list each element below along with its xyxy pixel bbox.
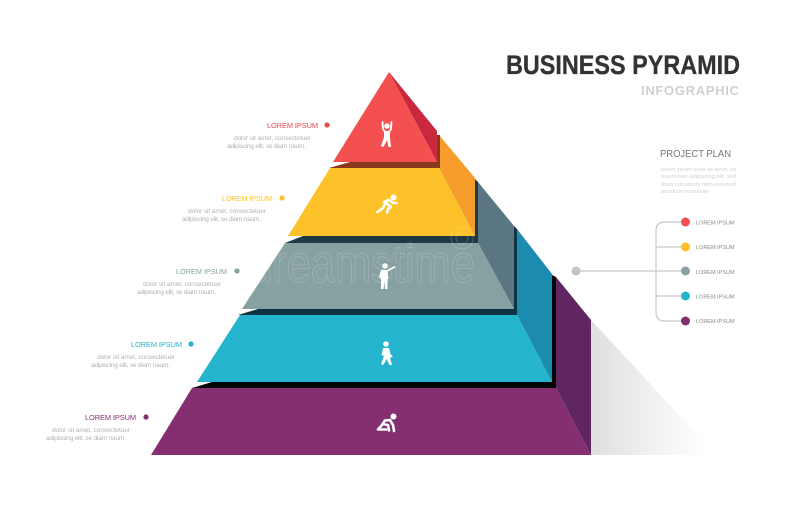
icon: person pointing [379, 263, 394, 289]
tier 4: blue [197, 229, 552, 382]
label 4: blue: dolor sit amet, consectetuer [97, 354, 176, 361]
tier 1 shadow [329, 135, 440, 168]
tier 3 shadow [238, 226, 517, 315]
project plan text: lorem ipsum dolor sit amet, co [661, 167, 736, 173]
label 4: blue: adipiscing elit, se diam naum. [91, 362, 170, 369]
project plan text: diam nonummy nibh euismod [661, 182, 736, 188]
label 3: grey: LOREM IPSUM [176, 267, 227, 276]
title: BUSINESS PYRAMID [506, 50, 740, 80]
connector start dot [572, 266, 580, 276]
tier 4 shadow [192, 275, 556, 388]
pyramid [151, 72, 591, 455]
tier 3: grey [242, 182, 514, 309]
label 5: purple: dolor sit amet, consectetuer [52, 427, 131, 434]
project plan heading: PROJECT PLAN [660, 148, 731, 160]
legend item 4 [681, 292, 735, 300]
tier 2: yellow [288, 135, 475, 236]
icon: walking person [381, 341, 393, 365]
subtitle: INFOGRAPHIC [641, 83, 740, 98]
legend item 1: LOREM IPSUM [696, 220, 735, 226]
project plan text: nsectetuer adipiscing elit, sed [661, 174, 736, 180]
label 5: purple: LOREM IPSUM [85, 413, 136, 422]
label 4: blue [91, 340, 194, 369]
legend item 3: LOREM IPSUM [696, 270, 735, 276]
legend item 1 [681, 218, 735, 226]
icon: running person [378, 194, 396, 212]
tier 2 shadow [285, 179, 478, 243]
cast shadow [591, 320, 705, 455]
tier 1: red [333, 72, 437, 162]
label 3: grey: dolor sit amet, consectetuer [143, 281, 222, 288]
legend item 2: LOREM IPSUM [696, 245, 735, 251]
legend item 5 [681, 316, 735, 326]
legend item 4: LOREM IPSUM [696, 294, 735, 300]
project plan text: tincidunt reconsuer [661, 189, 709, 195]
tier 5: purple [151, 277, 591, 455]
label 1: red: adipiscing elit, se diam naum. [227, 143, 306, 150]
legend item 5: LOREM IPSUM [696, 319, 735, 325]
project plan text [661, 167, 736, 195]
label 2: yellow: adipiscing elit, se diam naum. [182, 216, 261, 223]
label 1: red [227, 121, 330, 150]
label 2: yellow: dolor sit amet, consectetuer [188, 208, 267, 215]
label 3: grey: adipiscing elit, se diam naum. [137, 289, 216, 296]
label 2: yellow [182, 194, 285, 223]
label 2: yellow: LOREM IPSUM [222, 194, 272, 203]
label 1: red: dolor sit amet, consectetuer [234, 135, 312, 142]
icon: crawling person [378, 414, 396, 431]
label 3: grey [137, 267, 240, 296]
legend item 2 [681, 242, 735, 252]
watermark: dreamstime [248, 234, 475, 294]
label 5: purple: adipiscing elit, se diam naum. [46, 435, 126, 442]
legend item 3 [681, 266, 735, 276]
label 1: red: LOREM IPSUM [267, 121, 318, 130]
icon: person arms raised [381, 122, 392, 147]
connector tree [576, 222, 685, 321]
label 4: blue: LOREM IPSUM [131, 340, 182, 349]
label 5: purple [46, 413, 149, 442]
